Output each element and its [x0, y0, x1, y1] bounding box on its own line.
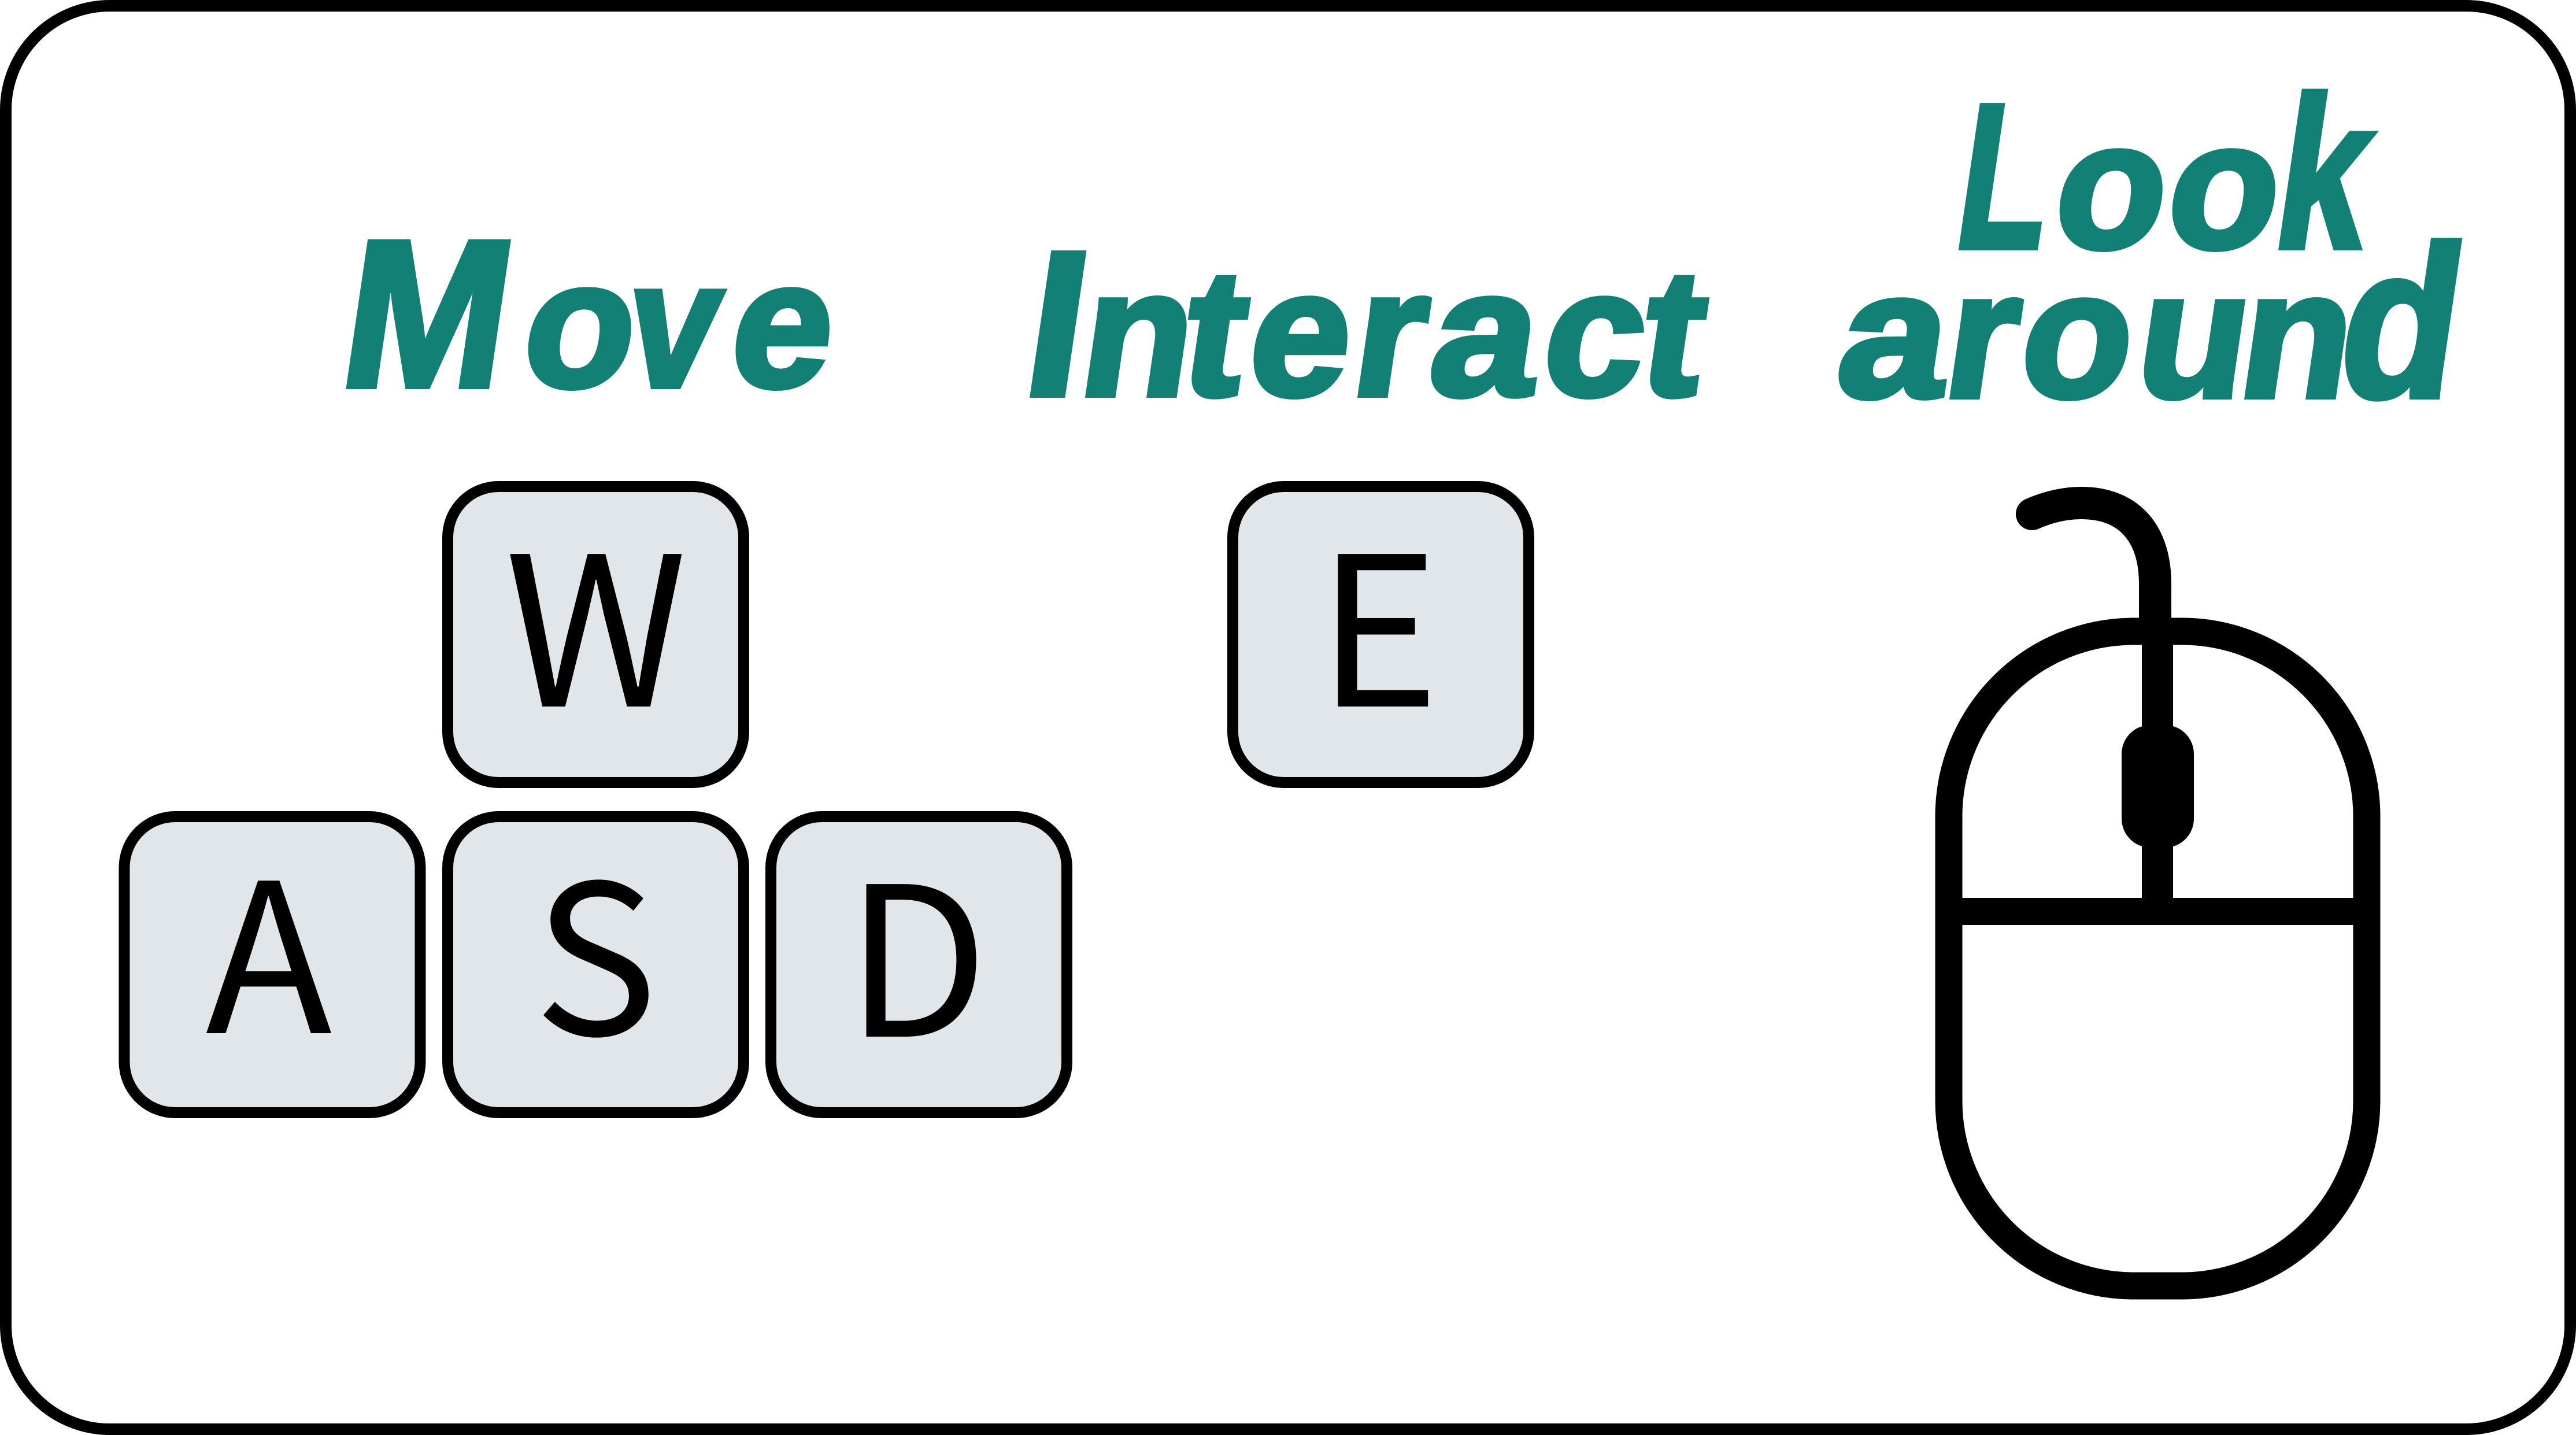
mouse button divider [1948, 898, 2367, 925]
heading: Move: e [720, 224, 849, 425]
key: W [447, 465, 743, 783]
heading: around: o [2009, 235, 2148, 435]
key: S: S [534, 793, 657, 1095]
heading: around: n [2229, 235, 2368, 435]
key: E: E [1317, 465, 1439, 767]
heading: around: r [1934, 235, 2033, 435]
heading: Interact: n [1070, 233, 1209, 434]
mouse cable [2032, 503, 2155, 624]
icon: mouse [1948, 503, 2367, 1286]
key: S [447, 793, 743, 1112]
heading: around: u [2126, 235, 2264, 435]
key: D: D [845, 795, 989, 1097]
heading: Interact: r [1342, 233, 1441, 434]
key: D [771, 795, 1067, 1112]
heading: Interact: c [1532, 233, 1661, 434]
heading: Interact: a [1419, 233, 1555, 434]
heading: Interact: t [1172, 233, 1261, 434]
heading: Move: v [617, 224, 735, 425]
mouse centre line [2142, 619, 2173, 908]
key: A: A [206, 792, 332, 1093]
mouse body [1949, 631, 2367, 1286]
heading: around: d [2326, 202, 2478, 443]
heading: Move: o [512, 224, 651, 425]
heading: Look: k [2263, 53, 2389, 294]
key: A [124, 792, 420, 1112]
heading: Interact: e [1238, 233, 1367, 434]
key: W: W [505, 465, 687, 767]
heading: Interact: I [1013, 209, 1104, 439]
heading: Interact: t [1630, 233, 1719, 434]
heading: Look: o [2044, 86, 2182, 286]
heading: around: a [1827, 235, 1965, 435]
key: E [1233, 465, 1528, 783]
mouse wheel [2122, 725, 2194, 848]
heading: Move: M [330, 198, 528, 431]
heading: Look: o [2156, 86, 2295, 286]
heading: Look: L [1945, 61, 2068, 291]
